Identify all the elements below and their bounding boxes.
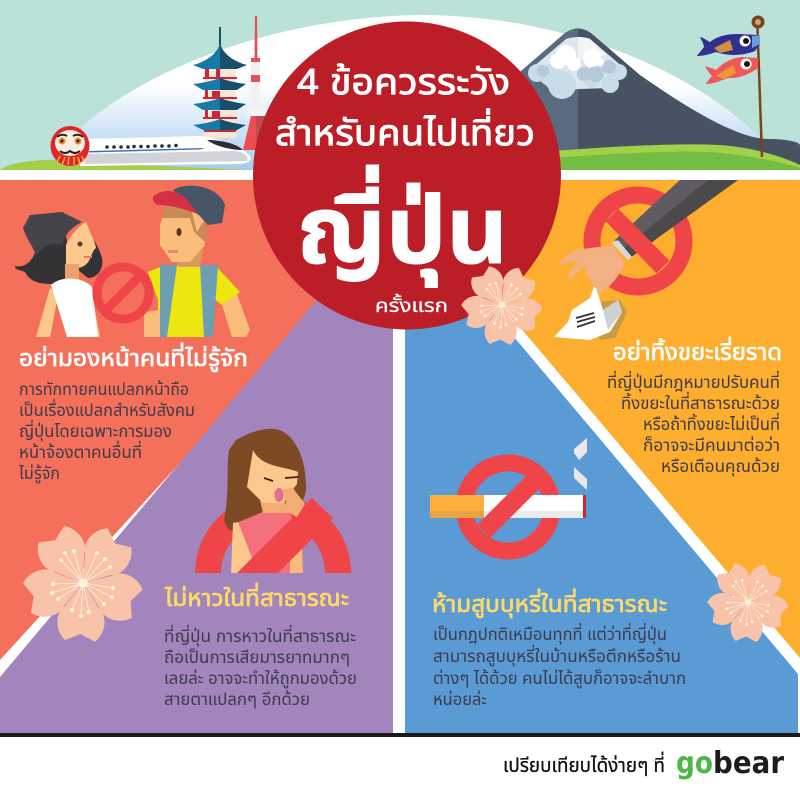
text: coral panel: ไม่รู้จัก <box>18 463 60 485</box>
text: blue panel: หน่อยล่ะ <box>433 690 487 709</box>
heading: purple panel: ไม่หาวในที่สาธารณะ <box>164 582 349 611</box>
text: blue panel: ต่างๆ ได้ด้วย คนไม่ได้สูบก็อาจจะลำบาก <box>433 668 686 690</box>
text: coral panel <box>18 379 195 485</box>
mount fuji <box>400 28 800 170</box>
hair <box>224 429 306 531</box>
panel: blue <box>405 280 798 733</box>
icon: two people <box>15 186 250 337</box>
logo: gobear <box>676 746 784 781</box>
heading: blue panel: ห้ามสูบบุหรี่ในที่สาธารณะ <box>432 588 667 619</box>
panel: coral <box>0 180 420 660</box>
text: orange panel: ก็อาจจะมีคนมาต่อว่า <box>643 436 780 455</box>
text: orange panel: ที่ญี่ปุ่นมีกฎหมายปรับคนที่ <box>607 370 780 393</box>
daruma doll <box>50 126 90 166</box>
flower: right <box>706 560 791 642</box>
title text: ญี่ปุ่น <box>297 165 508 288</box>
text: blue panel <box>433 622 686 709</box>
crumpled paper <box>591 300 627 340</box>
text: orange panel: ทิ้งขยะในที่สาธารณะด้วย <box>621 391 780 413</box>
face <box>247 450 298 503</box>
text: purple panel <box>164 624 357 709</box>
text: orange panel: หรือเตือนคุณด้วย <box>661 456 780 477</box>
logo: gobear: bear <box>713 746 784 781</box>
slash <box>237 498 333 573</box>
no-entry sign <box>97 267 149 319</box>
panel: purple <box>0 296 393 733</box>
text: purple panel: สายตาแปลกๆ อีกด้วย <box>164 689 310 709</box>
white sky dome <box>44 15 762 170</box>
no-entry ring <box>464 463 552 551</box>
title badge <box>253 22 561 330</box>
hand <box>560 245 625 293</box>
hand <box>283 487 305 517</box>
neck <box>260 500 290 513</box>
title text <box>275 61 535 317</box>
text: coral panel: ญี่ปุ่นโดยเฉพาะการมอง <box>19 419 172 442</box>
woman <box>15 212 102 337</box>
body <box>231 512 302 573</box>
title text: ครั้งแรก <box>375 293 448 317</box>
text: coral panel: หน้าจ้องตาคนอื่นที่ <box>19 440 142 462</box>
text: orange panel <box>607 370 780 477</box>
text: coral panel: เป็นเรื่องแปลกสำหรับสังคม <box>19 398 195 420</box>
slash <box>477 475 540 538</box>
no-entry ring <box>592 195 684 287</box>
tokyo tower <box>243 16 265 150</box>
text: blue panel: เป็นกฎปกติเหมือนทุกที่ แต่ว่าที่ญี่ปุ่น <box>433 622 667 645</box>
flower: left <box>21 522 146 642</box>
green hills <box>0 144 800 170</box>
smoke <box>574 438 587 460</box>
text: coral panel: การทักทายคนแปลกหน้าถือ <box>19 379 189 399</box>
title text: 4 ข้อควรระวัง <box>297 61 510 102</box>
no-entry ring <box>195 495 351 573</box>
text: blue panel: สามารถสูบบุหรี่ในบ้านหรือตึกหรือร้าน <box>433 644 681 668</box>
icon: hand dropping litter <box>554 180 738 340</box>
slash <box>612 215 663 267</box>
icon: no smoking <box>430 438 587 551</box>
logo: gobear: go <box>676 746 713 781</box>
text: purple panel: ถือเป็นการเสียมารยาทมากๆ <box>164 648 350 667</box>
heading: coral panel: อย่ามองหน้าคนที่ไม่รู้จัก <box>19 342 248 373</box>
cigarette <box>430 495 586 518</box>
koinobori carp streamers <box>697 16 764 157</box>
footer rule <box>0 733 800 737</box>
panel: orange <box>420 180 800 658</box>
man <box>144 186 250 337</box>
bullet train <box>80 136 251 166</box>
pagoda <box>193 27 247 138</box>
flower: top <box>460 263 545 345</box>
sleeve <box>615 180 738 258</box>
title text: สำหรับคนไปเที่ยว <box>275 108 535 153</box>
footer tagline: เปรียบเทียบได้ง่ายๆ ที่ <box>503 751 665 777</box>
text: purple panel: เลยล่ะ อาจจะทำให้ถูกมองด้วย <box>164 668 357 690</box>
heading: orange panel: อย่าทิ้งขยะเรี่ยราด <box>613 336 782 365</box>
sky background <box>0 0 800 170</box>
text: purple panel: ที่ญี่ปุ่น การหาวในที่สาธารณะ <box>164 624 356 647</box>
icon: yawning woman <box>195 429 351 573</box>
text: orange panel: หรือถ้าทิ้งขยะไม่เป็นที่ <box>643 412 780 434</box>
